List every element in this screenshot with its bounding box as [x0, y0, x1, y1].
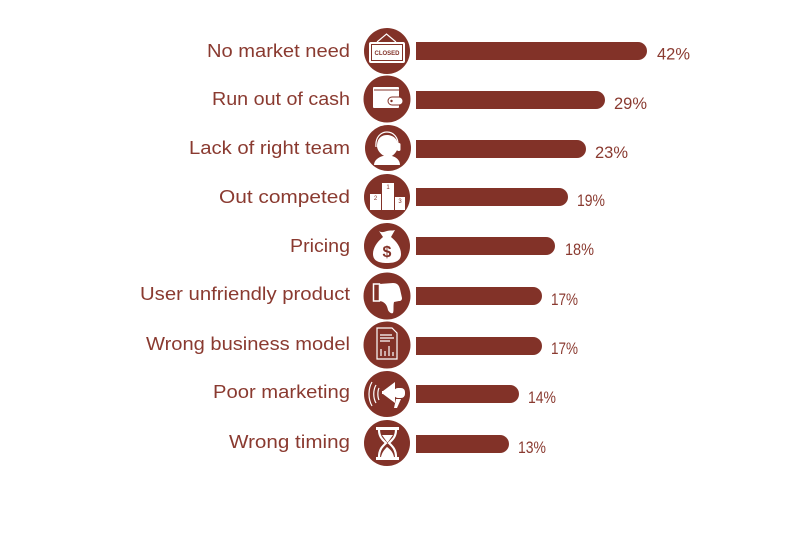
row: out competed [219, 174, 605, 220]
value: 14% [528, 388, 556, 407]
label: Out competed [219, 187, 350, 207]
row: pricing [290, 223, 594, 269]
icon: megaphone [364, 371, 410, 417]
label: Wrong timing [229, 432, 350, 452]
value: 17% [551, 290, 578, 309]
value: 17% [551, 339, 578, 358]
label: Lack of right team [189, 138, 350, 158]
bar [416, 237, 555, 255]
icon: closed sign [364, 28, 410, 74]
row: user unfriendly product [140, 272, 578, 320]
label: Pricing [290, 236, 350, 256]
label: No market need [207, 41, 350, 61]
bar [416, 188, 568, 206]
value: 42% [657, 44, 690, 64]
icon: closed sign: CLOSED [374, 50, 400, 57]
icon: report document [364, 322, 410, 368]
icon: hourglass [364, 420, 410, 466]
icon: podium [364, 174, 410, 220]
value: 19% [577, 191, 605, 210]
bar [416, 140, 586, 158]
value: 29% [614, 94, 647, 113]
row: lack of right team [189, 125, 628, 171]
bar [416, 287, 542, 305]
icon: thumbs down [364, 272, 410, 320]
label: User unfriendly product [140, 284, 350, 304]
value: 18% [565, 240, 594, 259]
bar [416, 435, 509, 453]
value: 13% [518, 438, 546, 457]
icon: podium: 3 [398, 199, 402, 205]
bar [416, 91, 605, 109]
label: Poor marketing [213, 382, 350, 402]
icon: podium: 1 [386, 185, 390, 191]
icon: wallet [364, 76, 410, 122]
row: wrong timing [229, 420, 546, 466]
row: wrong business model [146, 322, 578, 368]
row: no market need [207, 28, 690, 74]
icon: podium: 2 [374, 196, 378, 202]
row: run out of cash [212, 76, 647, 122]
bar [416, 337, 542, 355]
bar [416, 42, 647, 60]
icon: person with headset [365, 125, 411, 171]
icon: money bag: $ [383, 244, 392, 261]
icon: money bag [364, 223, 410, 269]
label: Run out of cash [212, 89, 350, 109]
bar [416, 385, 519, 403]
label: Wrong business model [146, 334, 350, 354]
value: 23% [595, 143, 628, 162]
row: poor marketing [213, 371, 556, 417]
